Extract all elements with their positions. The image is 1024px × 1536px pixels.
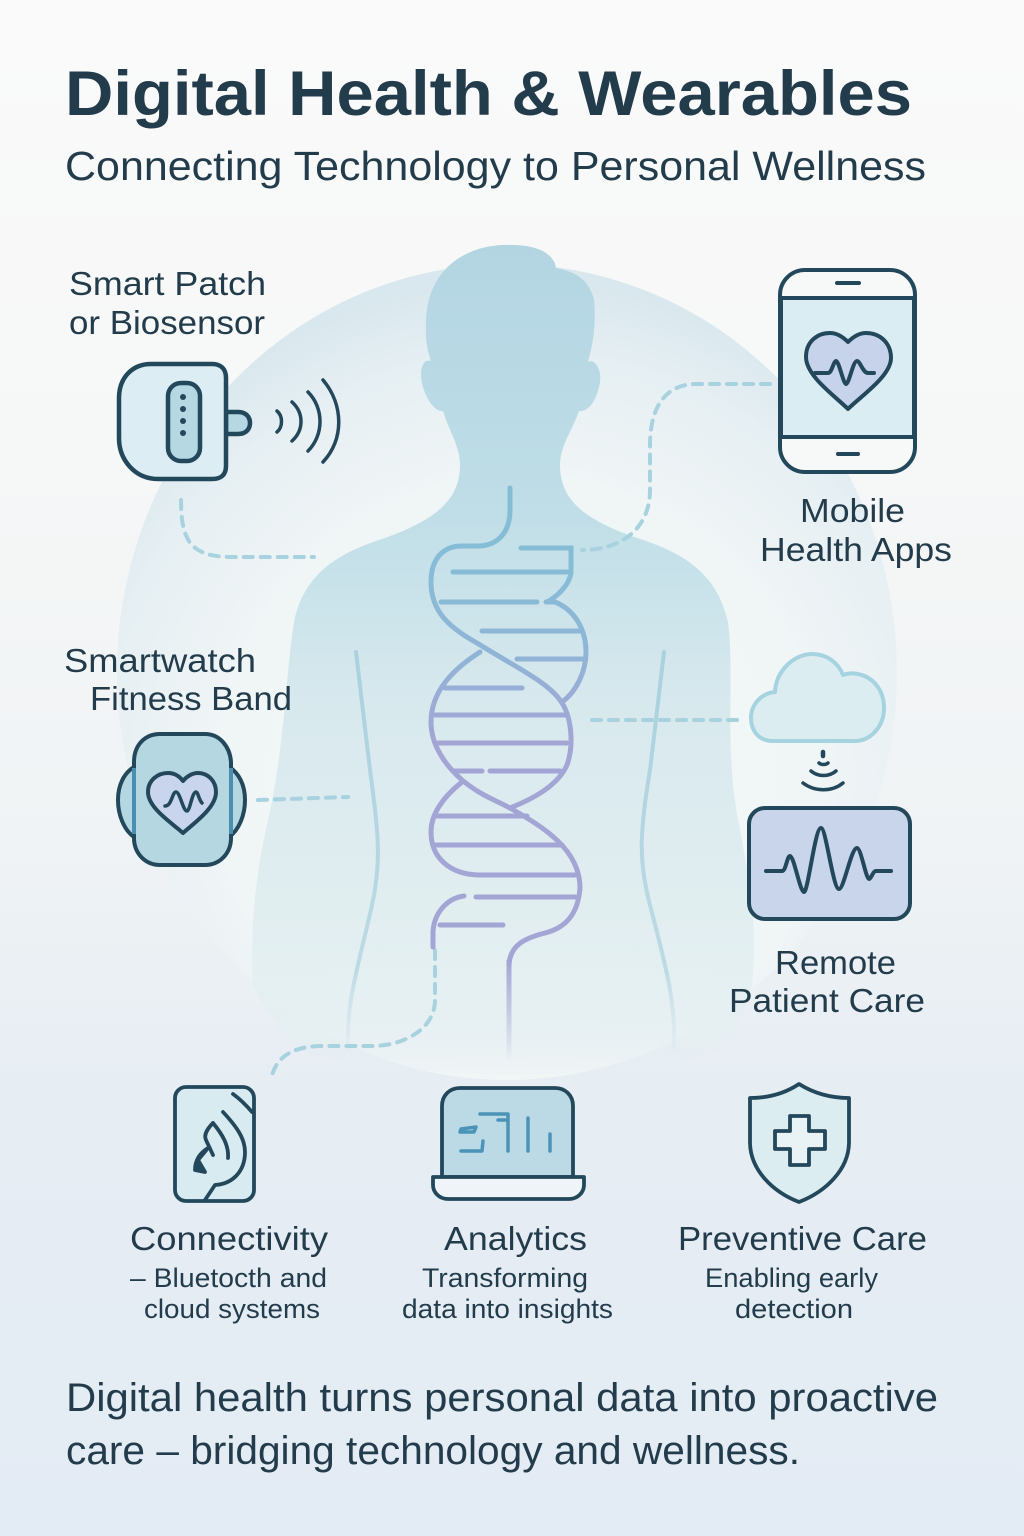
human silhouette — [252, 245, 754, 1074]
icon: cloud — [751, 654, 884, 741]
panel: connectivity — [130, 1087, 329, 1324]
panel: smart patch — [69, 265, 339, 479]
label: smartwatch fitness band — [64, 642, 292, 717]
label: smartwatch fitness band: Fitness Band — [90, 680, 292, 717]
icon: smartwatch — [118, 734, 245, 865]
text: connectivity description: – Bluetocth and — [130, 1263, 327, 1293]
icon: ECG monitor — [749, 808, 910, 919]
icon: smartphone with heart — [780, 270, 915, 472]
text: preventive care description — [705, 1263, 878, 1324]
panel: smartwatch — [64, 642, 292, 865]
icon: laptop with chart — [433, 1088, 584, 1199]
text: connectivity description: cloud systems — [144, 1294, 320, 1324]
label: smartwatch fitness band: Smartwatch — [64, 642, 256, 679]
icon: wireless signal — [803, 752, 843, 790]
icon: biosensor patch — [119, 364, 339, 479]
footer statement: Digital health turns personal data into proactive — [66, 1376, 938, 1420]
text: preventive care description: detection — [735, 1294, 853, 1324]
title: Digital Health & Wearables — [65, 59, 912, 129]
footer statement — [66, 1376, 938, 1473]
label: remote patient care: Remote — [775, 944, 896, 981]
heading: connectivity: Connectivity — [130, 1220, 329, 1257]
text: connectivity description — [130, 1263, 327, 1324]
panel: mobile health apps — [760, 270, 952, 568]
label: mobile health apps: Mobile — [800, 492, 905, 529]
label: remote patient care — [729, 944, 925, 1019]
label: smart patch: or Biosensor — [69, 304, 265, 341]
label: smart patch — [69, 265, 266, 341]
text: analytics description: data into insights — [402, 1294, 613, 1324]
dashed connectors — [181, 384, 770, 1076]
text: analytics description — [402, 1263, 613, 1324]
label: smart patch: Smart Patch — [69, 265, 266, 302]
label: remote patient care: Patient Care — [729, 982, 925, 1019]
text: preventive care description: Enabling early — [705, 1263, 878, 1293]
panel: preventive care — [678, 1084, 927, 1324]
DNA double helix — [431, 488, 586, 1062]
panel: analytics — [402, 1088, 613, 1324]
panel: remote patient care — [729, 654, 925, 1019]
heading: analytics: Analytics — [444, 1220, 587, 1257]
text: analytics description: Transforming — [422, 1263, 588, 1293]
label: mobile health apps: Health Apps — [760, 531, 952, 568]
footer statement: care – bridging technology and wellness. — [66, 1429, 800, 1473]
icon: connectivity device — [175, 1087, 254, 1201]
icon: shield with cross — [750, 1084, 849, 1202]
heading: preventive care: Preventive Care — [678, 1220, 927, 1257]
label: mobile health apps — [760, 492, 952, 568]
background circle — [117, 264, 897, 1080]
subtitle: Connecting Technology to Personal Wellness — [65, 143, 926, 189]
